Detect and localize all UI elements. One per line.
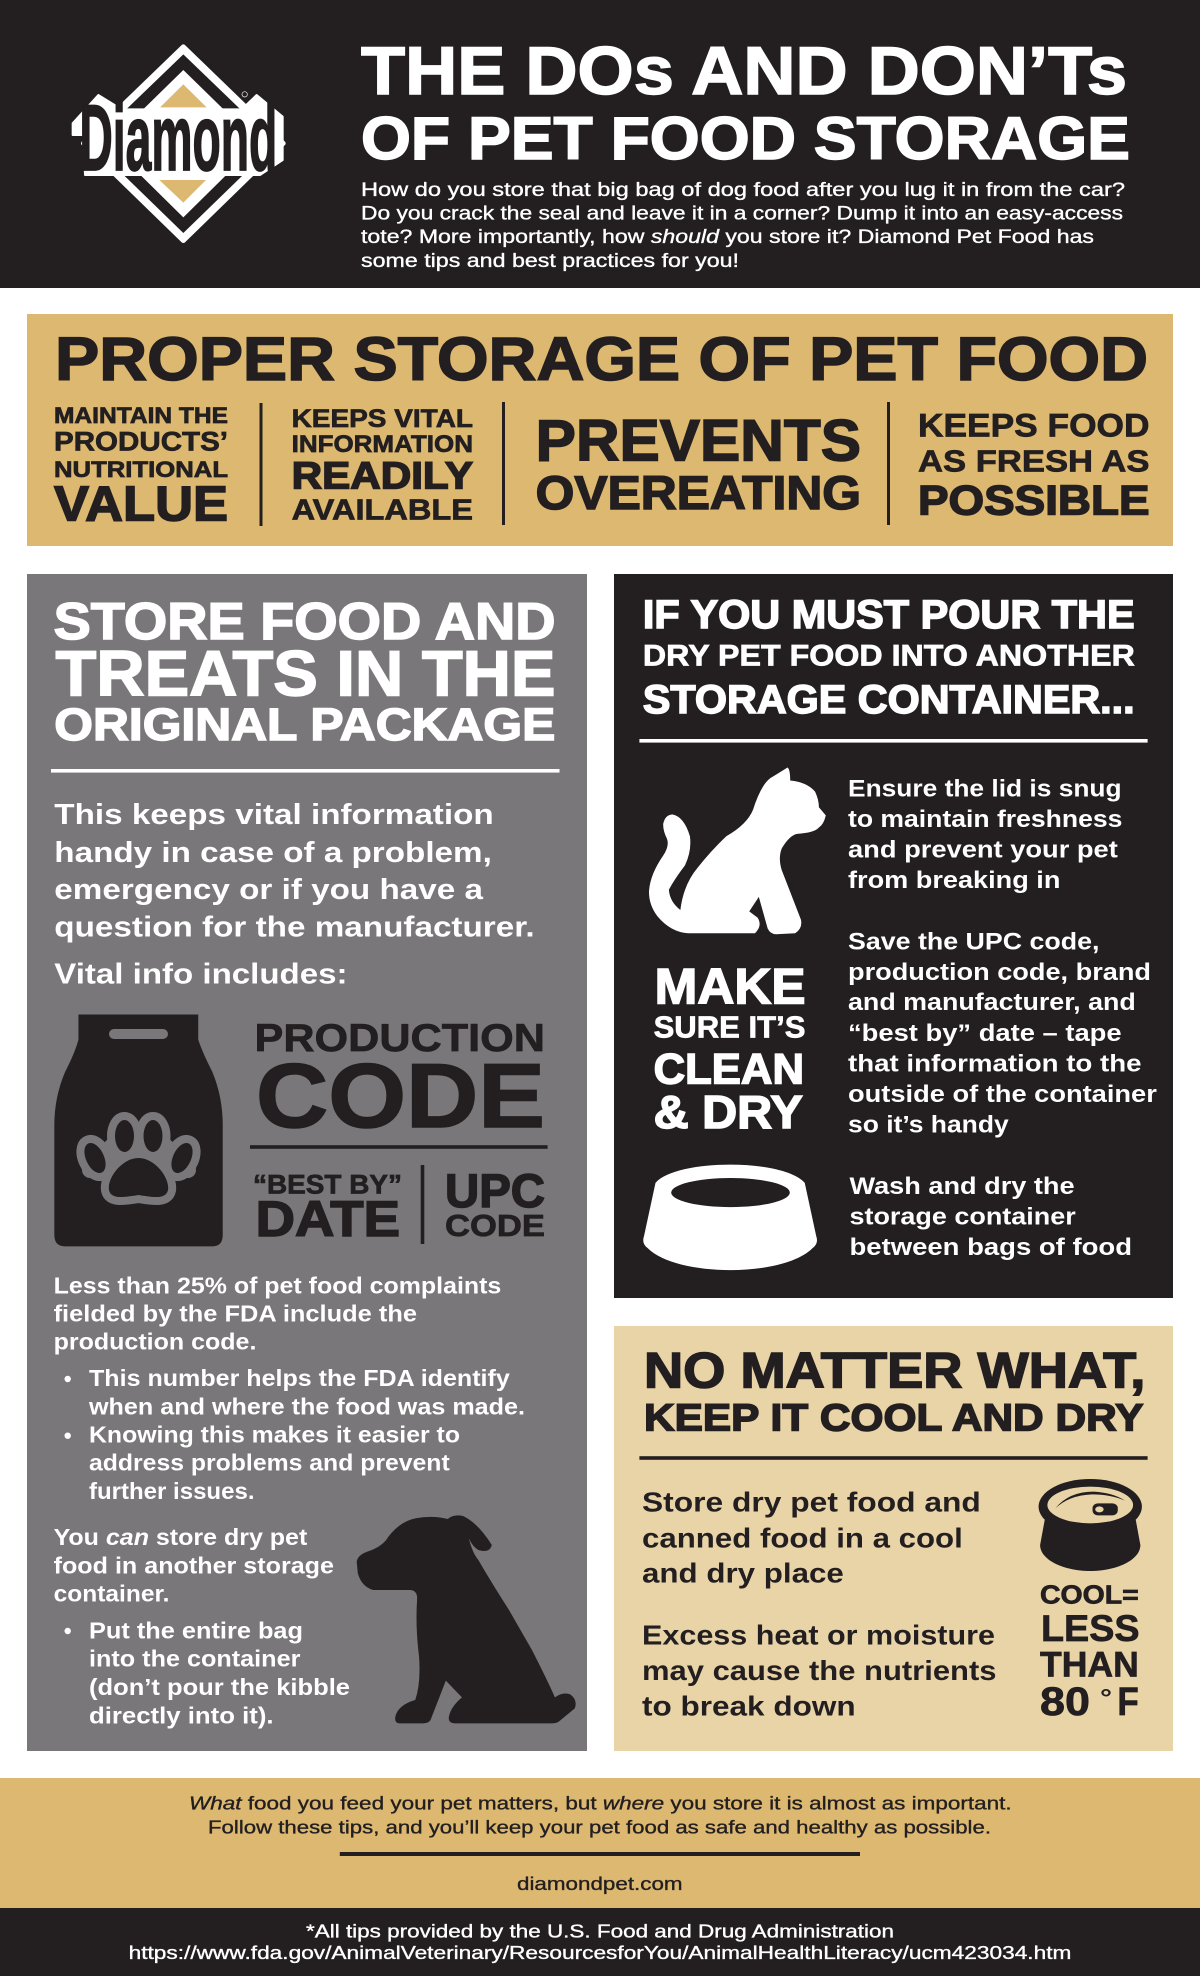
label: UPC code: UPC <box>445 1164 545 1217</box>
text: closing statement: Follow these tips, and you’ll keep your pet food as safe and healthy as possible. <box>208 1816 991 1837</box>
text: wash tip: Wash and dry the <box>850 1173 1075 1200</box>
callout: cool temperature: F <box>1117 1680 1139 1724</box>
benefit: nutritional value: NUTRITIONAL <box>54 457 228 482</box>
text: why the package matters <box>54 799 535 990</box>
text: FDA complaints: fielded by the FDA include the <box>54 1301 417 1327</box>
icon: food can <box>1039 1479 1142 1571</box>
label: UPC code: CODE <box>445 1208 545 1243</box>
text: store cool and dry: canned food in a cool <box>642 1522 963 1553</box>
text: source note: https://www.fda.gov/AnimalVeterinary/ResourcesforYou/AnimalHealthLiteracy/ucm423034.htm <box>129 1942 1071 1963</box>
heading: store food: ORIGINAL PACKAGE <box>54 699 555 750</box>
benefit: information available <box>292 405 473 527</box>
benefit: keeps food fresh <box>918 407 1150 523</box>
panel: proper storage <box>27 314 1173 546</box>
text: save the codes tip: and manufacturer, and <box>848 989 1136 1016</box>
benefit: keeps food fresh: KEEPS FOOD <box>918 407 1150 443</box>
text: website: diamondpet.com <box>517 1873 683 1894</box>
text: why the package matters: This keeps vital information <box>54 799 494 831</box>
heading: proper storage: PROPER STORAGE OF PET FOOD <box>55 325 1148 393</box>
list: production code bullets: Knowing this makes it easier to <box>89 1422 460 1448</box>
heading: store food: TREATS IN THE <box>56 637 556 709</box>
list: container bullet <box>64 1617 350 1728</box>
benefit: prevents overeating: OVEREATING <box>536 466 861 519</box>
text: wash tip: storage container <box>850 1204 1076 1230</box>
title: OF PET FOOD STORAGE <box>361 105 1130 172</box>
text: save the codes tip: that information to the <box>848 1050 1142 1077</box>
text: save the codes tip <box>848 929 1157 1138</box>
text: FDA complaints: production code. <box>54 1328 256 1354</box>
text: why the package matters: handy in case of a problem, <box>54 837 492 869</box>
icon: food bag with paw <box>54 1015 223 1246</box>
list: container bullet: into the container <box>89 1646 300 1672</box>
callout: make sure it's clean and dry: SURE IT’S <box>654 1010 806 1044</box>
icon: sitting dog <box>357 1515 576 1723</box>
text: why the package matters: question for the manufacturer. <box>54 912 535 944</box>
label: best by date: DATE <box>256 1191 400 1247</box>
label: production code: PRODUCTION <box>254 1017 545 1060</box>
title: THE DOs AND DON’Ts <box>361 33 1127 109</box>
panel: source footer <box>0 1908 1200 1976</box>
text: save the codes tip: Save the UPC code, <box>848 929 1099 956</box>
text: save the codes tip: production code, brand <box>848 959 1151 986</box>
callout: cool temperature: THAN <box>1040 1646 1139 1685</box>
text: another container <box>54 1524 334 1607</box>
panel: pour into another container <box>614 574 1173 1298</box>
benefit: keeps food fresh: POSSIBLE <box>918 476 1150 523</box>
list: production code bullets: further issues. <box>89 1478 254 1504</box>
list: production code bullets: This number helps the FDA identify <box>89 1365 510 1391</box>
panel: header <box>0 0 1200 288</box>
benefit: information available: KEEPS VITAL <box>292 405 473 433</box>
list: container bullet: Put the entire bag <box>89 1617 303 1643</box>
text: source note <box>129 1921 1071 1963</box>
benefit: prevents overeating: PREVENTS <box>536 409 861 474</box>
heading: if you must pour: IF YOU MUST POUR THE <box>643 593 1135 637</box>
text: store cool and dry: and dry place <box>642 1557 844 1588</box>
text: excess heat <box>642 1619 996 1722</box>
text: save the codes tip: outside of the container <box>848 1081 1157 1108</box>
intro text: some tips and best practices for you! <box>361 250 739 272</box>
text: another container: container. <box>54 1581 170 1607</box>
text: lid tip: to maintain freshness <box>848 806 1122 833</box>
label: UPC code <box>445 1164 545 1243</box>
intro text: Do you crack the seal and leave it in a corner? Dump it into an easy-access <box>361 203 1123 225</box>
text: store cool and dry: Store dry pet food and <box>642 1487 981 1518</box>
text: closing statement: What food you feed your pet matters, but where you store it is almost as important. <box>189 1792 1012 1813</box>
heading: no matter what: NO MATTER WHAT, <box>644 1343 1145 1399</box>
text: FDA complaints: Less than 25% of pet food complaints <box>54 1272 501 1298</box>
callout: cool temperature: 80 <box>1040 1680 1090 1724</box>
text: FDA complaints <box>54 1272 501 1354</box>
benefit: nutritional value: PRODUCTS’ <box>54 427 228 457</box>
text: another container: food in another storage <box>54 1552 334 1578</box>
logo: Diamond: Diamond <box>79 86 277 190</box>
panel: closing message <box>0 1778 1200 1908</box>
logo: Diamond <box>73 47 283 241</box>
label: best by date <box>253 1170 402 1247</box>
text: lid tip <box>848 776 1122 894</box>
heading: no matter what: KEEP IT COOL AND DRY <box>644 1398 1143 1440</box>
text: wash tip: between bags of food <box>850 1234 1132 1261</box>
benefit: information available: AVAILABLE <box>292 495 473 527</box>
benefit: information available: READILY <box>292 456 473 498</box>
callout: cool temperature: COOL= <box>1040 1579 1139 1609</box>
heading: if you must pour <box>643 593 1135 722</box>
heading: store food <box>54 593 556 750</box>
list: container bullet: directly into it). <box>89 1702 274 1728</box>
icon: sitting cat <box>649 767 826 934</box>
callout: cool temperature: ° <box>1100 1685 1112 1712</box>
callout: make sure it's clean and dry: MAKE <box>655 958 806 1014</box>
text: save the codes tip: “best by” date – tape <box>848 1020 1122 1047</box>
callout: cool temperature: LESS <box>1041 1608 1140 1649</box>
intro text: How do you store that big bag of dog food after you lug it in from the car? <box>361 179 1125 201</box>
text: wash tip <box>850 1173 1132 1261</box>
text: why the package matters: emergency or if you have a <box>54 874 484 906</box>
label: production code: CODE <box>256 1046 545 1147</box>
title <box>361 33 1130 172</box>
text: excess heat: may cause the nutrients <box>642 1655 996 1686</box>
callout: make sure it's clean and dry: CLEAN <box>654 1046 804 1094</box>
list: production code bullets <box>64 1365 525 1504</box>
heading: if you must pour: STORAGE CONTAINER... <box>643 678 1135 722</box>
text: why the package matters: Vital info includes: <box>54 958 348 990</box>
text: excess heat: Excess heat or moisture <box>642 1619 995 1650</box>
callout: cool temperature <box>1040 1579 1140 1724</box>
list: container bullet: (don’t pour the kibble <box>89 1674 350 1700</box>
text: lid tip: Ensure the lid is snug <box>848 776 1122 802</box>
benefit: nutritional value <box>54 403 228 532</box>
text: another container: You can store dry pet <box>54 1524 307 1550</box>
list: production code bullets: address problems and prevent <box>89 1450 450 1476</box>
benefit: information available: INFORMATION <box>292 431 473 458</box>
benefit: nutritional value: MAINTAIN THE <box>54 403 228 428</box>
text: closing statement <box>189 1792 1012 1837</box>
callout: make sure it's clean and dry: & DRY <box>654 1086 803 1138</box>
heading: if you must pour: DRY PET FOOD INTO ANOTHER <box>643 640 1135 673</box>
text: excess heat: to break down <box>642 1691 856 1722</box>
benefit: nutritional value: VALUE <box>54 478 228 532</box>
text: store cool and dry <box>642 1487 981 1588</box>
label: best by date: “BEST BY” <box>253 1170 402 1200</box>
benefit: prevents overeating <box>536 409 861 519</box>
text: save the codes tip: so it’s handy <box>848 1112 1009 1138</box>
intro text <box>361 179 1125 272</box>
heading: no matter what <box>644 1343 1145 1440</box>
text: lid tip: and prevent your pet <box>848 837 1118 864</box>
benefit: keeps food fresh: AS FRESH AS <box>918 443 1150 478</box>
panel: original package <box>27 574 587 1751</box>
text: lid tip: from breaking in <box>848 867 1060 894</box>
icon: pet bowl <box>643 1165 817 1270</box>
text: source note: *All tips provided by the U.S. Food and Drug Administration <box>306 1921 894 1942</box>
heading: store food: STORE FOOD AND <box>54 593 556 651</box>
panel: cool and dry <box>614 1326 1173 1751</box>
callout: make sure it's clean and dry <box>654 958 806 1138</box>
intro text: tote? More importantly, how should you store it? Diamond Pet Food has <box>361 226 1094 248</box>
list: production code bullets: when and where the food was made. <box>88 1393 525 1419</box>
